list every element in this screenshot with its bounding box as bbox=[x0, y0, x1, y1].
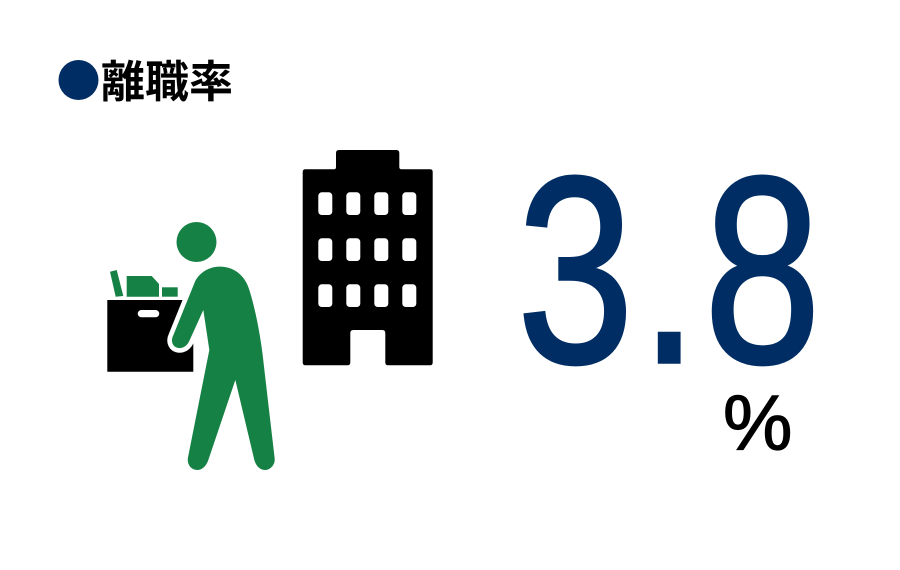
big number: 3.8: . bbox=[640, 121, 698, 419]
person head bbox=[176, 222, 216, 262]
icon: person carrying box bbox=[107, 222, 275, 470]
big number: 3.8 bbox=[517, 121, 821, 419]
box items bbox=[110, 270, 178, 297]
heading: turnover rate bbox=[58, 58, 233, 107]
heading text: 離職率 bbox=[101, 58, 233, 107]
percent sign: % bbox=[723, 378, 792, 466]
cardboard box bbox=[107, 300, 193, 372]
building windows bbox=[318, 192, 416, 307]
person body bbox=[172, 267, 275, 470]
big number: 3.8: 8 bbox=[704, 121, 821, 419]
big number: 3.8: 3 bbox=[517, 121, 634, 419]
icon: office building bbox=[303, 150, 433, 365]
heading bullet bbox=[58, 60, 98, 100]
